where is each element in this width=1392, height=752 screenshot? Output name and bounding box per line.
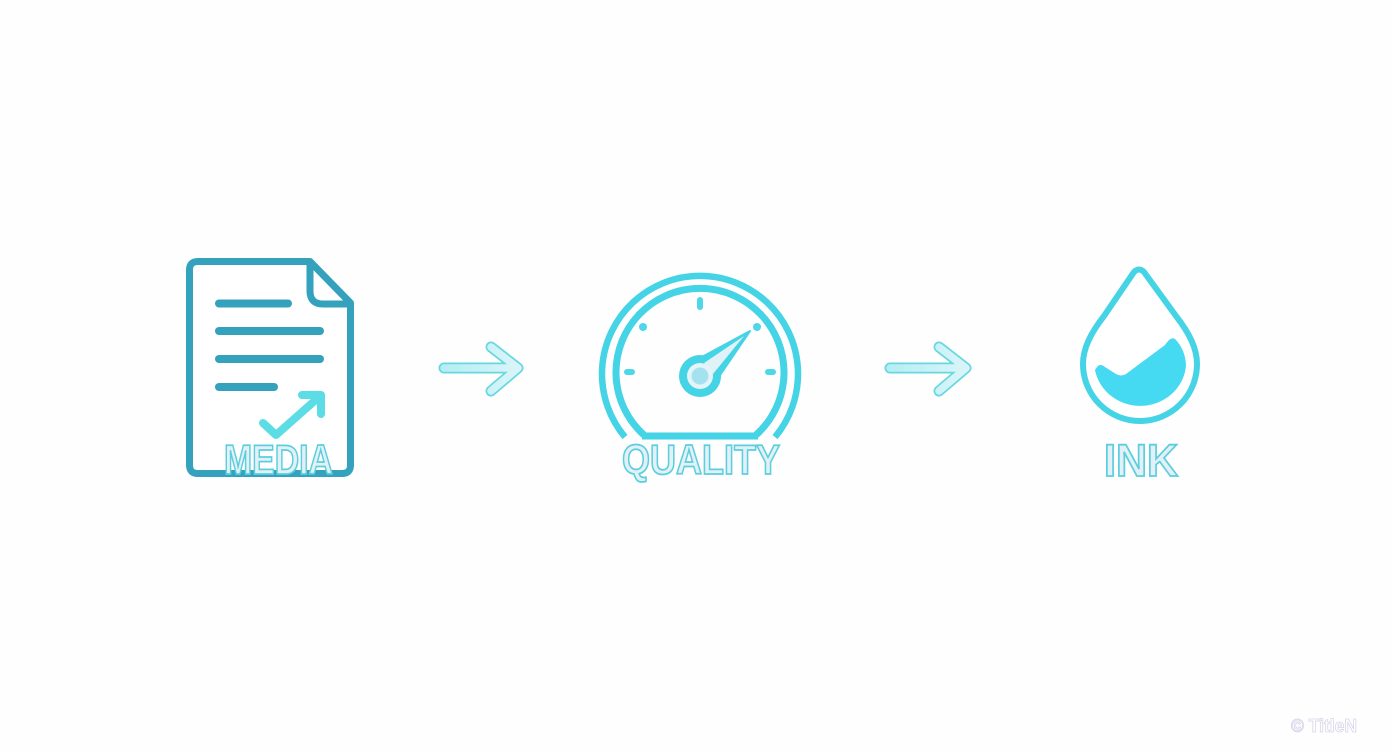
gauge needle: [679, 331, 750, 397]
ink fill: [1095, 338, 1186, 406]
label: INK: INK: [1104, 435, 1178, 486]
label: MEDIA: MEDIA: [224, 436, 333, 483]
icon: rising arrow: [263, 395, 321, 435]
icon: quality gauge: [602, 276, 798, 437]
icon: media document: [190, 262, 350, 474]
icon: ink drop: [1083, 270, 1197, 421]
arrow: quality to ink: [890, 347, 966, 391]
arrow: media to quality: [444, 347, 518, 391]
label: QUALITY: QUALITY: [622, 436, 780, 483]
watermark: © TitleN: [1291, 716, 1357, 736]
